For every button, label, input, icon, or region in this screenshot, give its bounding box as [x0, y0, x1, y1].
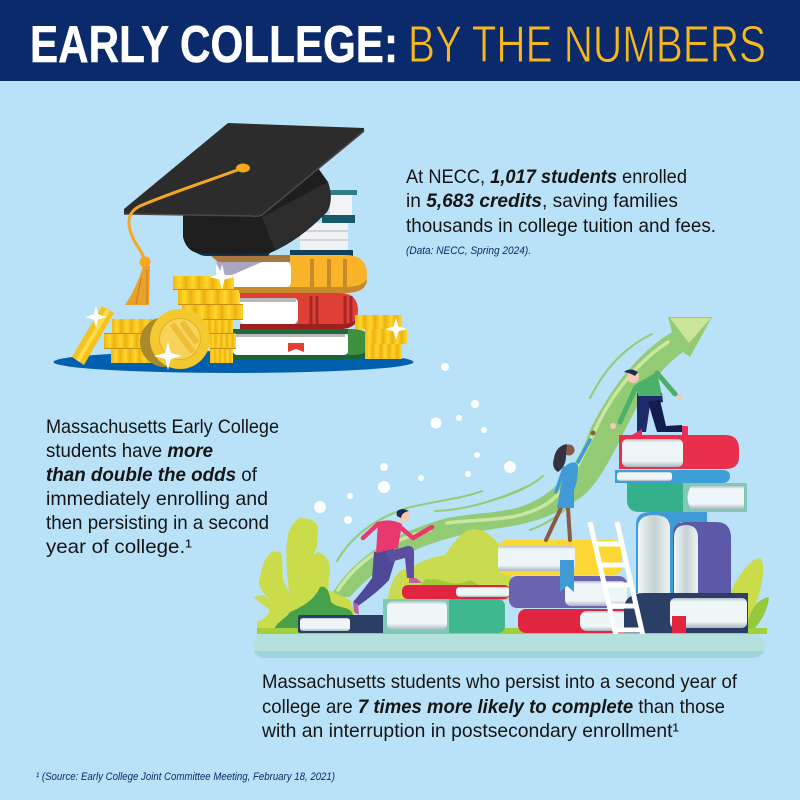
book tower — [615, 435, 748, 633]
shadow ellipse — [54, 351, 414, 373]
text: NECC enrollment stat: thousands in college tuition and fees. — [406, 215, 716, 237]
graduation cap — [124, 123, 364, 305]
illustration: people climbing books — [253, 317, 769, 658]
ladder — [590, 522, 644, 640]
footnote source: ¹ (Source: Early College Joint Committee Meeting, February 18, 2021) — [36, 771, 335, 783]
text: NECC enrollment stat — [406, 166, 716, 257]
figure: woman reaching — [546, 430, 596, 540]
text: NECC enrollment stat: (Data: NECC, Spring 2024). — [406, 245, 531, 257]
text: odds of persisting — [46, 416, 279, 558]
growth arrow — [330, 317, 712, 597]
gold coins — [72, 276, 407, 369]
text: seven times more likely — [261, 671, 738, 742]
text: odds of persisting: Massachusetts Early College — [46, 416, 279, 438]
book steps — [298, 540, 633, 633]
text: odds of persisting: then persisting in a second — [46, 512, 269, 534]
title — [30, 16, 766, 74]
figure: kneeling man — [610, 370, 688, 435]
text: odds of persisting: immediately enrolling and — [46, 488, 268, 510]
figure: running man — [353, 509, 432, 615]
text: odds of persisting: students have more — [46, 440, 213, 462]
white dots — [314, 363, 516, 524]
text: seven times more likely: Massachusetts students who persist into a second year of — [262, 671, 738, 693]
text: odds of persisting: year of college.¹ — [46, 536, 193, 558]
sparkles — [85, 264, 407, 370]
text: NECC enrollment stat: At NECC, 1,017 students enrolled — [406, 166, 687, 188]
title: EARLY COLLEGE: — [30, 16, 398, 74]
text: seven times more likely: college are 7 times more likely to complete than those — [262, 696, 725, 718]
plants — [253, 518, 769, 634]
text: NECC enrollment stat: in 5,683 credits, saving families — [406, 190, 678, 212]
header banner — [0, 0, 800, 81]
book stack — [210, 190, 371, 359]
text: odds of persisting: than double the odds of — [46, 464, 258, 486]
illustration: graduation cap on books and coins — [54, 123, 414, 373]
platform — [253, 634, 765, 658]
text: seven times more likely: with an interruption in postsecondary enrollment¹ — [261, 720, 679, 742]
tassel — [125, 164, 250, 305]
